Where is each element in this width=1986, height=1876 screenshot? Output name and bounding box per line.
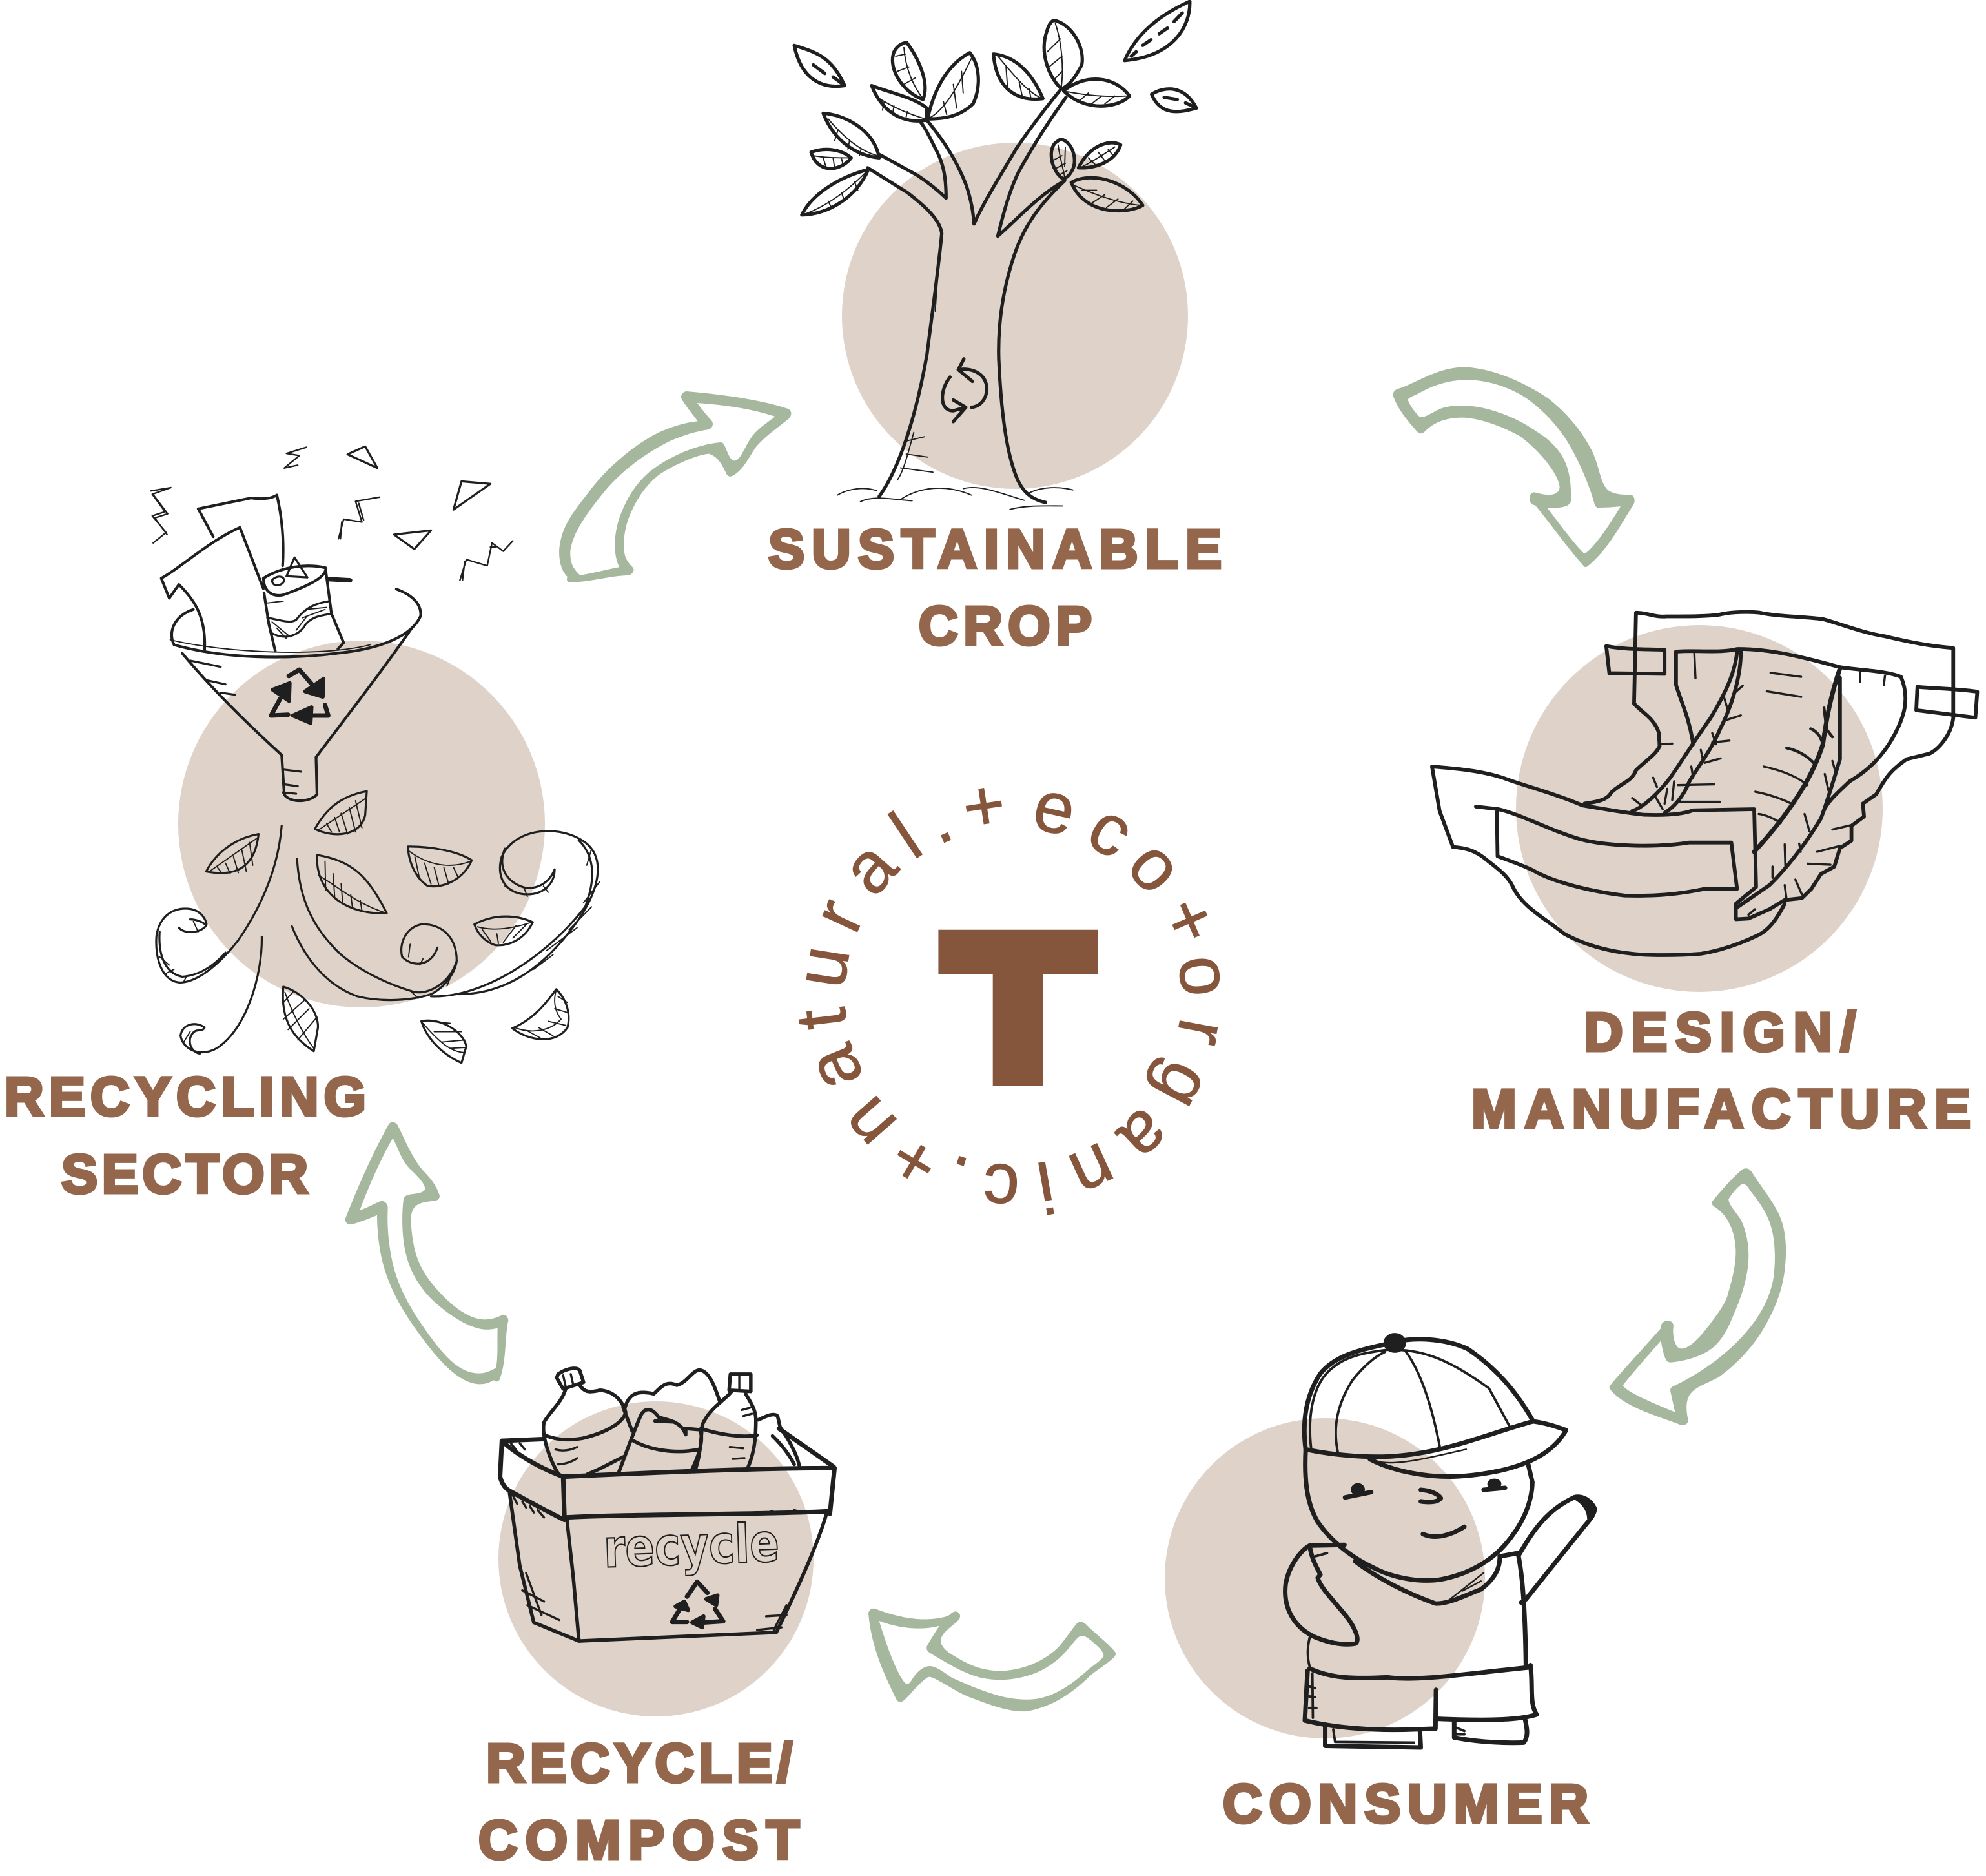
- ring text: r: [796, 887, 879, 943]
- ring text: i: [1031, 1146, 1061, 1228]
- heading: recycling sector: SECTOR: [61, 1144, 308, 1204]
- ring text: +: [957, 762, 1010, 849]
- background circle: consumer: [1165, 1418, 1485, 1738]
- ring text: o: [1163, 951, 1247, 1000]
- heading: sustainable crop: CROP: [919, 595, 1092, 656]
- arrow: recycle to recycling sector: [345, 1122, 508, 1384]
- heading: recycle / compost: [478, 1733, 799, 1870]
- ring text: t: [780, 1004, 862, 1034]
- ring text: n: [824, 1082, 912, 1166]
- ring text: n: [1058, 1128, 1129, 1217]
- heading: recycling sector: [5, 1066, 366, 1204]
- background circle: recycle: [498, 1401, 814, 1716]
- ring text: +: [1145, 885, 1236, 955]
- heading: recycle / compost: COMPOST: [478, 1809, 799, 1870]
- heading: recycle / compost: RECYCLE/: [486, 1733, 792, 1793]
- arrow: design to consumer: [1610, 1168, 1786, 1425]
- ring text: a: [788, 1035, 879, 1102]
- heading: consumer: CONSUMER: [1223, 1773, 1588, 1834]
- background circle: crop: [842, 143, 1188, 489]
- ring text: c: [1075, 786, 1147, 874]
- ring text: r: [1161, 1013, 1245, 1052]
- background circle: recycling sector: [178, 641, 545, 1007]
- ring text: +: [875, 1117, 952, 1208]
- ring text: l: [877, 798, 935, 874]
- arrow: consumer to recycle: [868, 1609, 1116, 1711]
- heading: sustainable crop: [768, 519, 1222, 656]
- ring text: a: [1103, 1094, 1188, 1180]
- ring text: .: [934, 1140, 977, 1222]
- icon: diaper: [1432, 612, 1977, 955]
- heading: design / manufacture: MANUFACTURE: [1471, 1078, 1971, 1139]
- ring text: c: [981, 1148, 1021, 1231]
- icon: child in cap: [1285, 1335, 1595, 1747]
- icon: funnel with waste and leaves: [151, 446, 600, 1063]
- panel: consumer: [1165, 1335, 1595, 1834]
- center badge: natural eco organic ring: [779, 762, 1247, 1231]
- ring text: u: [779, 940, 865, 993]
- heading: recycling sector: RECYCLING: [5, 1066, 366, 1127]
- ring text: e: [1027, 764, 1083, 851]
- icon: tree: [794, 1, 1196, 510]
- ring text: g: [1140, 1049, 1229, 1122]
- ring text: o: [1112, 824, 1200, 909]
- background circle: design: [1516, 625, 1883, 992]
- panel: sustainable crop: [768, 1, 1222, 656]
- arrow: recycling sector to crop: [559, 391, 791, 582]
- heading: design / manufacture: [1471, 1002, 1971, 1139]
- icon: recycling bin: [500, 1368, 835, 1641]
- ring text: .: [913, 777, 963, 860]
- heading: sustainable crop: SUSTAINABLE: [768, 519, 1222, 579]
- ring text: [779, 762, 1247, 1231]
- arrow: crop to design: [1393, 367, 1635, 567]
- ring text: a: [825, 825, 913, 909]
- heading: design / manufacture: DESIGN/: [1584, 1002, 1856, 1062]
- panel: design / manufacture: [1432, 612, 1977, 1139]
- text on bin: recycle: recycle: [602, 1512, 780, 1580]
- logo: T: [938, 930, 1098, 1086]
- panel: recycle / compost: [478, 1368, 835, 1870]
- panel: recycling sector: [5, 446, 600, 1204]
